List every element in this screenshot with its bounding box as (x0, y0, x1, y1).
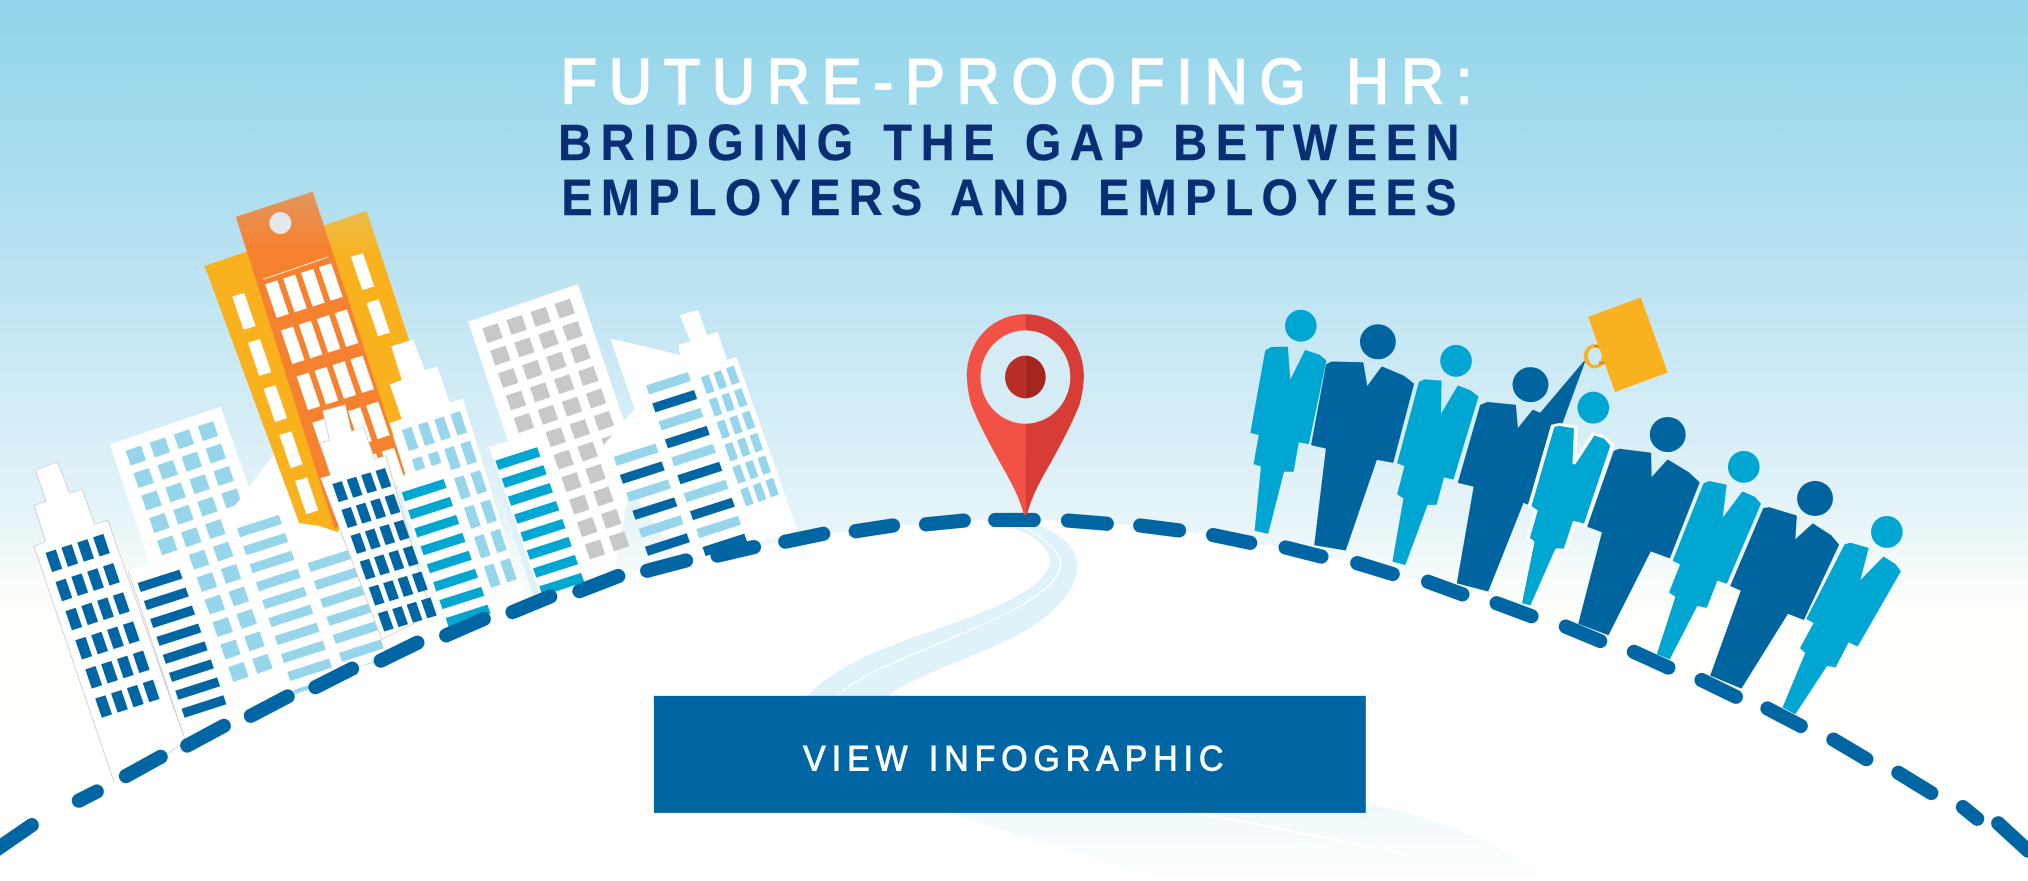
white hill (0, 520, 2028, 881)
building: stepped tower with dark windows (320, 405, 439, 639)
title line 1: FUTURE-PROOFING HR: (561, 47, 1472, 118)
button: view infographic (654, 696, 1366, 813)
building: light-blue square windows (110, 407, 303, 739)
building: white with light-blue bands (233, 454, 398, 705)
building: dark band block (128, 554, 230, 741)
person 1 (1251, 310, 1326, 533)
road to the pin (807, 524, 1077, 696)
building: teal band block (485, 431, 583, 597)
building: leftmost tall tower (34, 462, 186, 788)
building: stepped tower with teal bands (390, 339, 523, 629)
person 4 with raised arm (1458, 362, 1584, 591)
building: white with grey windows (468, 284, 660, 594)
icon: map pin (967, 314, 1084, 515)
person 8 (1711, 481, 1838, 688)
person 3 (1393, 345, 1478, 564)
building: orange tower (236, 192, 405, 529)
person 9 (1783, 516, 1903, 714)
person 7 (1658, 451, 1760, 659)
dashed path over the hill (0, 520, 2028, 851)
building: alternating bands (601, 310, 798, 562)
city skyline (34, 192, 798, 788)
button label: VIEW INFOGRAPHIC (803, 740, 1223, 779)
title (558, 47, 1472, 226)
person 6 (1579, 417, 1699, 634)
person 5 outlined (1520, 392, 1612, 607)
person 2 (1312, 324, 1413, 550)
title line 3: EMPLOYERS AND EMPLOYEES (561, 170, 1456, 226)
title line 2: BRIDGING THE GAP BETWEEN (558, 115, 1460, 171)
people group (1251, 297, 1903, 714)
icon: briefcase (1586, 297, 1668, 392)
faint road sweep below the button (949, 803, 1548, 881)
building: yellow tower (205, 211, 413, 532)
